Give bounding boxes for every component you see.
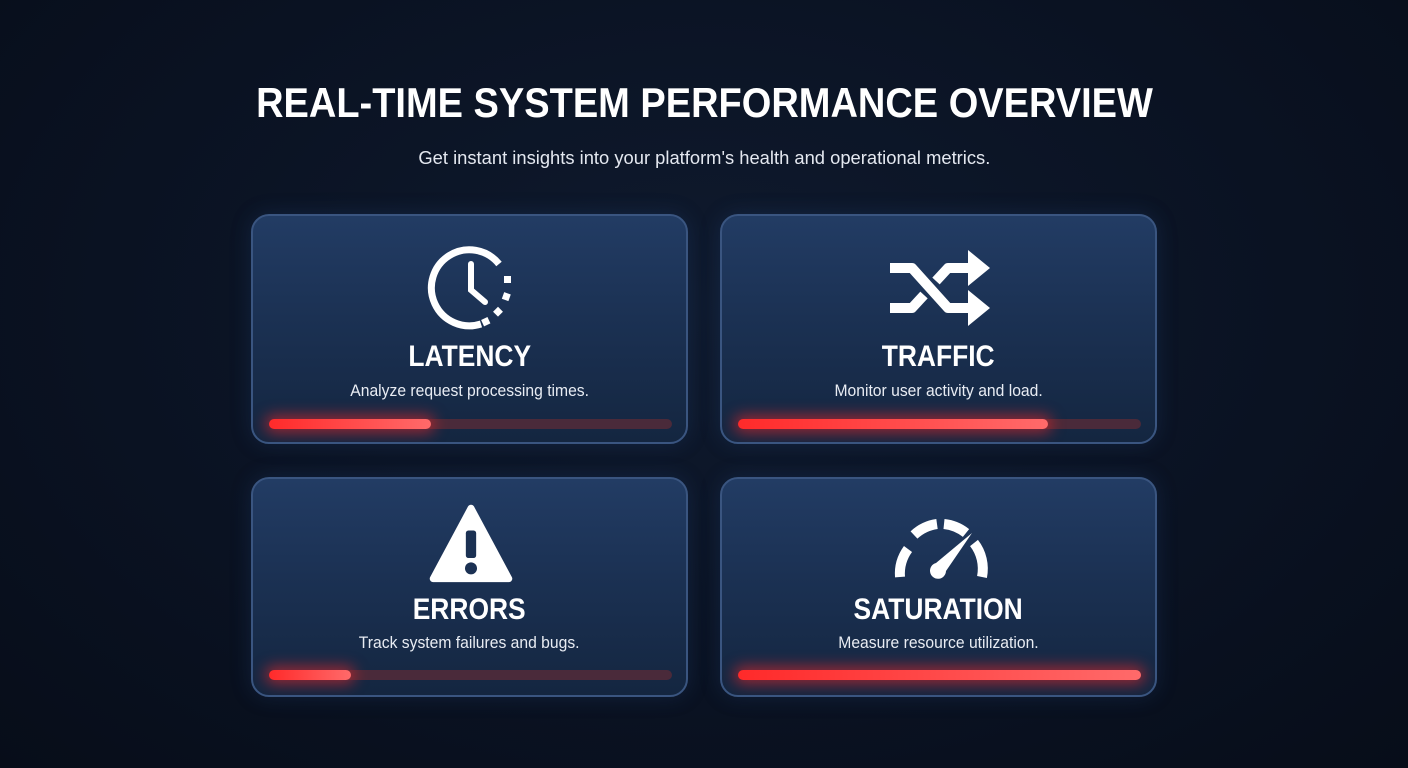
description: Measure resource utilization.: [838, 634, 1039, 652]
progress bar: [738, 419, 1141, 429]
panel: traffic: [720, 214, 1157, 444]
description: Analyze request processing times.: [350, 382, 589, 400]
description: Track system failures and bugs.: [359, 634, 580, 652]
icon: gauge: [894, 519, 988, 579]
icon: warning: [430, 504, 512, 582]
panel: saturation: [720, 477, 1157, 697]
heading: SATURATION: [854, 593, 1023, 626]
panel: errors: [251, 477, 688, 697]
heading: ERRORS: [413, 593, 526, 626]
panel: latency: [251, 214, 688, 444]
title: REAL-TIME SYSTEM PERFORMANCE OVERVIEW: [256, 79, 1152, 126]
icon: shuffle: [890, 250, 990, 326]
progress bar: [738, 670, 1141, 680]
heading: LATENCY: [408, 340, 531, 373]
subtitle: Get instant insights into your platform's health and operational metrics.: [418, 148, 990, 168]
description: Monitor user activity and load.: [834, 382, 1043, 400]
heading: TRAFFIC: [882, 340, 995, 373]
icon: clock: [428, 246, 511, 330]
progress bar: [269, 419, 672, 429]
progress bar: [269, 670, 672, 680]
